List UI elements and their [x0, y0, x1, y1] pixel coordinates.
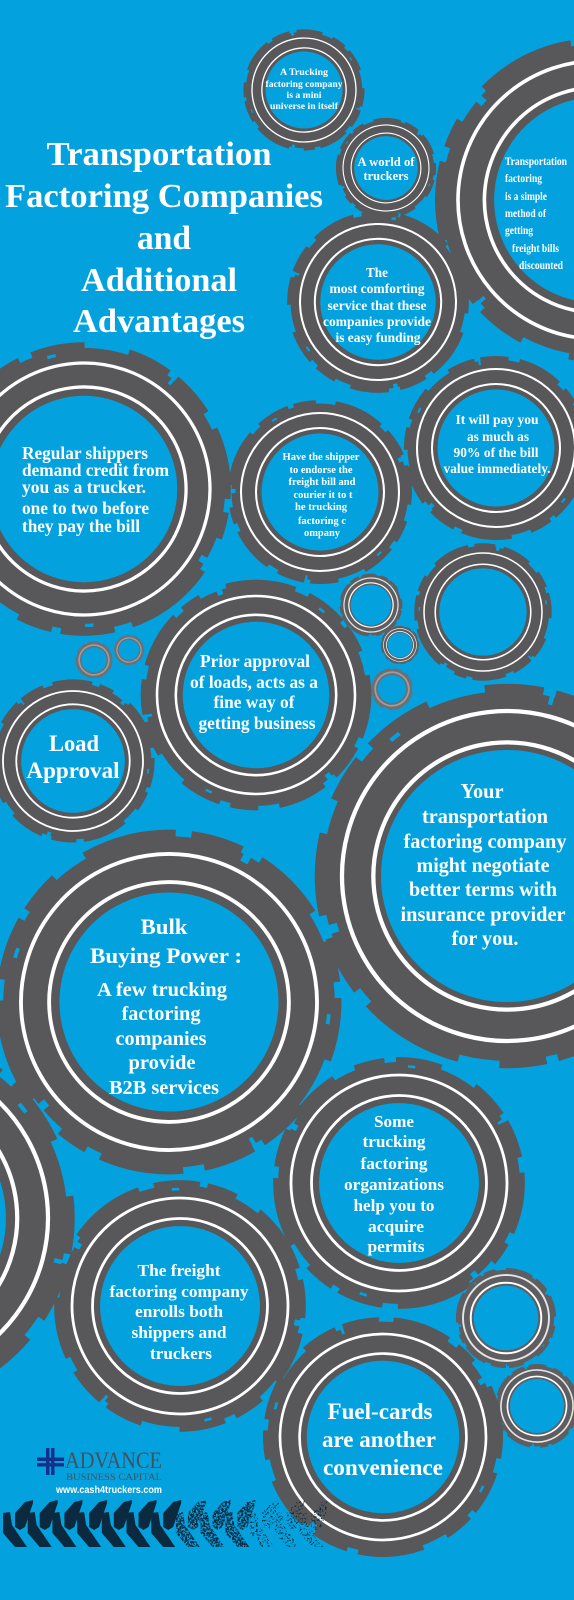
- logo: Advance Business Capital: BUSINESS CAPITAL: [66, 1473, 162, 1483]
- gear: prior approval: Prior approval: [200, 651, 310, 671]
- gear: pays 90 percent: value immediately.: [444, 462, 550, 477]
- gear: enrolls shippers and truckers: shippers and: [132, 1323, 227, 1342]
- gear: transportation factoring: freight bills: [512, 241, 559, 255]
- gear: enrolls shippers and truckers: enrolls both: [135, 1302, 224, 1321]
- gear: regular shippers: they pay the bill: [22, 516, 140, 536]
- gear: enrolls shippers and truckers: factoring company: [110, 1282, 249, 1301]
- gear: transportation factoring: method of: [505, 206, 547, 220]
- gear: comforting service: service that these: [328, 299, 426, 314]
- gear: fuel cards: [234, 1288, 532, 1586]
- gear: regular shippers: demand credit from: [22, 460, 169, 480]
- gear: bulk buying power: Buying Power :: [90, 943, 242, 968]
- gear: negotiate insurance: might negotiate: [416, 853, 550, 877]
- gear: endorse freight bill: he trucking: [295, 501, 347, 513]
- gear: regular shippers: Regular shippers: [22, 443, 148, 463]
- gear: regular shippers: [0, 288, 285, 690]
- logo: Advance Business Capital: [37, 1448, 162, 1496]
- gear: prior approval: fine way of: [214, 692, 295, 712]
- gear: permits: trucking: [362, 1132, 426, 1151]
- gear: bulk buying power: companies: [116, 1028, 207, 1050]
- gear: blank small 1: [336, 570, 406, 640]
- gear: bulk buying power: A few trucking: [97, 979, 227, 1001]
- title: and: [137, 220, 191, 257]
- icon: cross: [37, 1448, 64, 1475]
- gear: bulk buying power: factoring: [122, 1003, 200, 1025]
- title: [5, 136, 323, 340]
- gear: world of truckers: [326, 108, 446, 228]
- gear: transportation factoring: [376, 0, 574, 421]
- gear: permits: help you to: [354, 1196, 434, 1215]
- gear: permits: Some: [374, 1112, 414, 1131]
- gear: load approval: Load: [49, 731, 99, 756]
- gear: transportation factoring: factoring: [505, 171, 542, 185]
- gear: load approval: [0, 650, 184, 872]
- gear: pays 90 percent: as much as: [467, 430, 530, 445]
- gear: blank small faint 3: [364, 661, 420, 717]
- gear: pays 90 percent: 90% of the bill: [454, 446, 539, 461]
- gear: blank large: [389, 518, 574, 706]
- gear: comforting service: [265, 189, 491, 415]
- gear: blank small faint 4: [69, 635, 119, 685]
- gear: bulk buying power: [0, 774, 397, 1230]
- gear: blank small faint 5: [110, 631, 148, 669]
- logo: Advance Business Capital: www.cash4truckers.com: [55, 1485, 162, 1496]
- gear: blank small 2: [376, 621, 424, 669]
- gear: comforting service: The: [366, 266, 388, 281]
- gear: bulk buying power: provide: [128, 1052, 196, 1074]
- title: Transportation: [46, 136, 272, 173]
- gear: mini universe: universe in itself: [270, 102, 339, 112]
- gear: world of truckers: A world of: [358, 155, 415, 169]
- gear: prior approval: of loads, acts as a: [190, 672, 318, 692]
- gear: blank right small 2: [487, 1356, 574, 1456]
- gear: enrolls shippers and truckers: The freight: [138, 1261, 221, 1280]
- gear: transportation factoring: is a simple: [505, 189, 548, 203]
- gear: permits: organizations: [344, 1175, 444, 1194]
- gear: fuel cards: Fuel-cards: [328, 1399, 433, 1424]
- gear: bulk buying power: Bulk: [140, 914, 188, 939]
- gear: comforting service: companies provide: [323, 315, 431, 330]
- gear: negotiate insurance: transportation: [422, 804, 548, 828]
- gear: mini universe: A Trucking: [280, 68, 328, 78]
- gear: permits: factoring: [360, 1154, 428, 1173]
- gear: blank right small 1: [457, 1269, 555, 1367]
- tire tread: [3, 1500, 329, 1547]
- gear: negotiate insurance: better terms with: [409, 877, 557, 901]
- title: Factoring Companies: [5, 178, 323, 215]
- title: Additional: [81, 262, 237, 299]
- gear: endorse freight bill: ompany: [304, 527, 340, 539]
- gear: transportation factoring: getting: [505, 223, 533, 237]
- gear: left edge partial: [0, 994, 110, 1442]
- gear: negotiate insurance: [279, 648, 574, 1104]
- gear: negotiate insurance: insurance provider: [400, 902, 566, 926]
- title: Advantages: [73, 303, 245, 340]
- gear: enrolls shippers and truckers: truckers: [150, 1344, 212, 1363]
- gear: regular shippers: you as a trucker.: [22, 477, 146, 497]
- gear: pays 90 percent: [393, 345, 574, 551]
- gear: fuel cards: are another: [322, 1427, 436, 1452]
- gear: bulk buying power: B2B services: [109, 1077, 219, 1099]
- gear: permits: [232, 1016, 566, 1350]
- gear: prior approval: getting business: [198, 713, 316, 733]
- gear: endorse freight bill: to endorse the: [290, 464, 353, 476]
- gear: pays 90 percent: It will pay you: [456, 413, 539, 428]
- gear: negotiate insurance: factoring company: [404, 829, 567, 853]
- gear: mini universe: factoring company: [266, 80, 343, 90]
- gear: endorse freight bill: [217, 389, 423, 595]
- gear: endorse freight bill: factoring c: [298, 515, 346, 527]
- gear: endorse freight bill: freight bill and: [288, 476, 356, 488]
- gear: load approval: Approval: [26, 758, 120, 783]
- gear: enrolls shippers and truckers: [8, 1134, 352, 1478]
- gear: negotiate insurance: for you.: [452, 926, 518, 950]
- gear: negotiate insurance: Your: [460, 779, 504, 803]
- gear: permits: permits: [368, 1237, 425, 1256]
- gear: mini universe: [229, 15, 379, 165]
- gear: endorse freight bill: Have the shipper: [282, 451, 360, 463]
- gear: mini universe: is a mini: [286, 91, 322, 101]
- gear: prior approval: [126, 565, 386, 825]
- logo: Advance Business Capital: ADVANCE: [65, 1448, 162, 1473]
- gear: permits: acquire: [368, 1217, 424, 1236]
- gear: comforting service: most comforting: [330, 282, 424, 297]
- gear: world of truckers: truckers: [364, 169, 409, 183]
- gear: comforting service: is easy funding: [336, 331, 420, 346]
- gear: endorse freight bill: courier it to t: [294, 489, 353, 501]
- gear: fuel cards: convenience: [323, 1455, 443, 1480]
- gear: regular shippers: one to two before: [22, 498, 149, 518]
- gear: transportation factoring: discounted: [519, 258, 563, 272]
